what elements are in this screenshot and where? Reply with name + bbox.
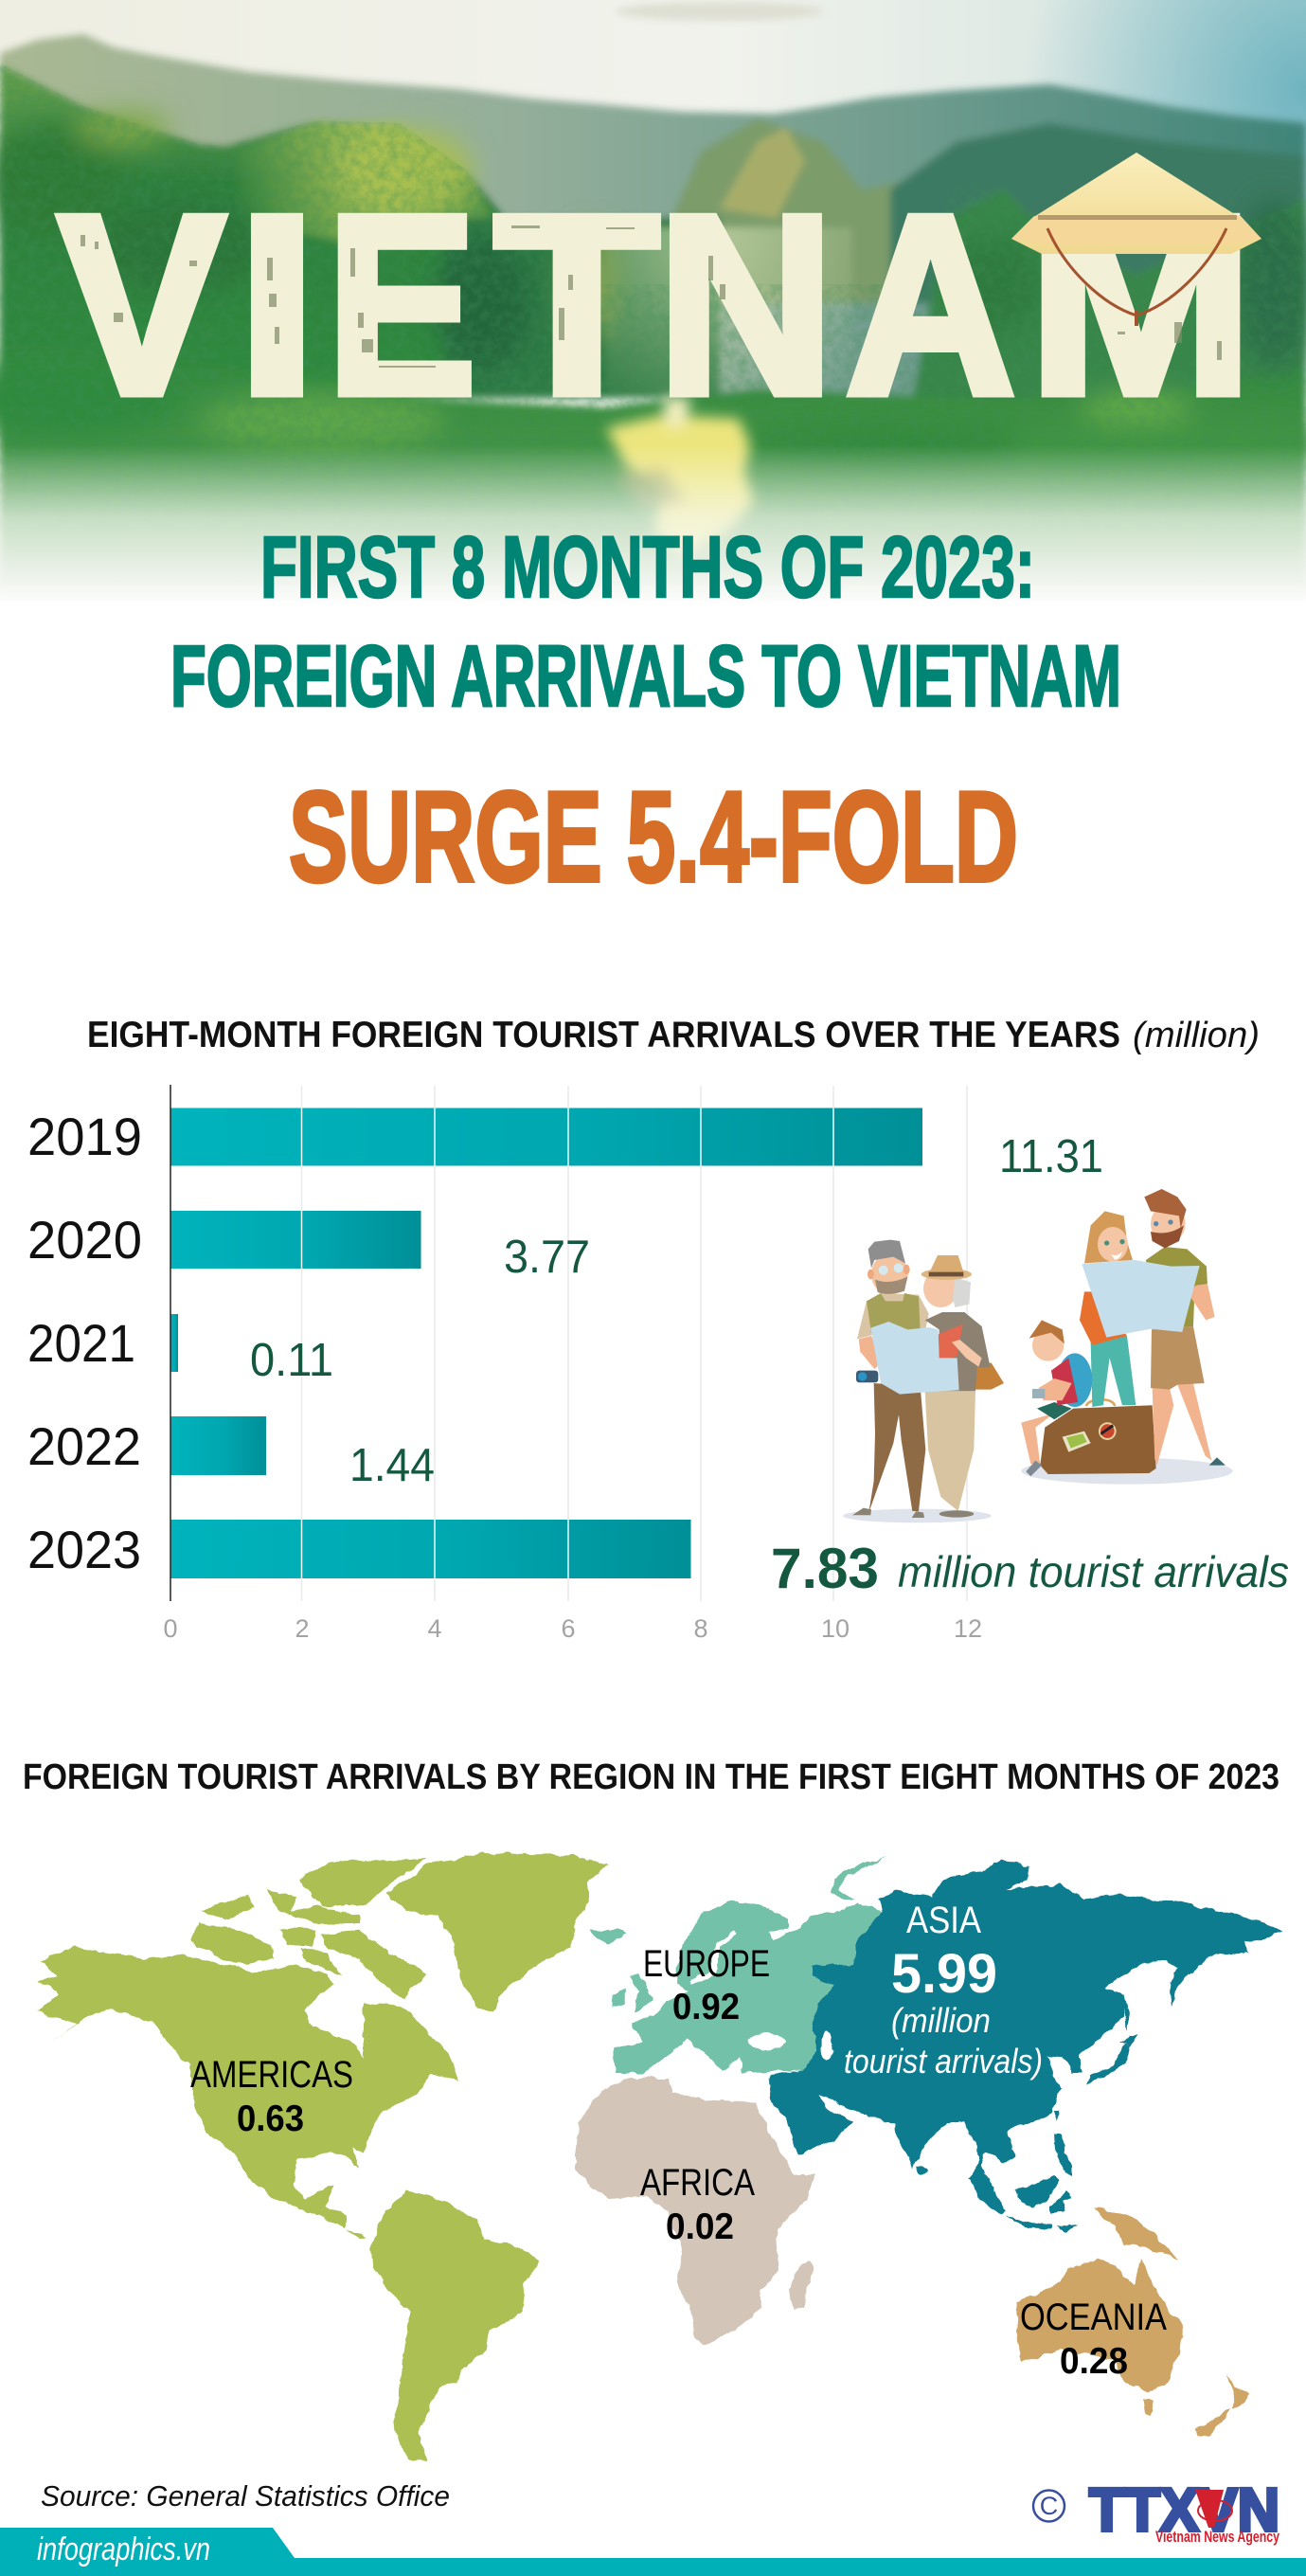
label: Americas 0.63: 0.63 <box>237 2099 304 2139</box>
hero: Vietnam landscape banner <box>0 0 1306 606</box>
title art: VIETNAM letters: I <box>236 162 318 448</box>
bar: 2023 <box>170 1520 691 1578</box>
title art: VIETNAM letters: N <box>657 162 834 448</box>
title art: VIETNAM letters: A <box>846 161 1015 447</box>
label: Americas 0.63: AMERICAS <box>190 2054 353 2096</box>
source note: Source: General Statistics Office <box>41 2479 450 2513</box>
icon: copyright <box>1033 2490 1064 2522</box>
value labels: 1.44 <box>349 1440 435 1491</box>
title art: VIETNAM letters <box>53 212 1241 398</box>
younger woman <box>1080 1211 1136 1407</box>
axis labels: 4 <box>427 1614 442 1643</box>
chart unit: (million) <box>1133 1016 1260 1055</box>
label: Europe 0.92 <box>643 1943 770 2027</box>
label: Asia 5.99 <box>844 1900 1043 2081</box>
label: Asia 5.99: tourist arrivals) <box>844 2042 1043 2081</box>
year labels: 2021 <box>27 1313 135 1373</box>
year labels: 2019 <box>27 1107 142 1166</box>
older man <box>852 1240 929 1518</box>
callout: 2023 total: million tourist arrivals <box>898 1547 1289 1596</box>
label: Oceania 0.28: OCEANIA <box>1020 2297 1167 2338</box>
icon: conical hat <box>1011 153 1261 326</box>
bar: 2019 <box>170 1108 922 1165</box>
bar: 2021 <box>170 1314 178 1372</box>
map held by couple <box>870 1322 959 1395</box>
axis labels: 2 <box>295 1614 310 1643</box>
younger man <box>1144 1189 1225 1466</box>
footer site name: infographics.vn <box>37 2531 210 2567</box>
title art: VIETNAM letters: E <box>327 162 476 447</box>
bar chart: arrivals by year <box>27 1085 1103 1643</box>
axis labels: 10 <box>821 1614 850 1643</box>
logo: TTXVN Vietnam News Agency: TTXVN <box>1089 2476 1279 2544</box>
label: Africa 0.02: 0.02 <box>666 2207 734 2247</box>
bar: 2022 <box>170 1416 266 1475</box>
value labels: 0.11 <box>250 1335 333 1386</box>
year labels: 2023 <box>27 1520 141 1579</box>
label: Asia 5.99: 5.99 <box>891 1943 997 2005</box>
region: Oceania <box>1016 2207 1249 2437</box>
label: Oceania 0.28 <box>1020 2297 1167 2382</box>
title art: VIETNAM letters: M <box>1028 161 1254 447</box>
label: Africa 0.02 <box>640 2162 755 2247</box>
region: Americas <box>38 1853 609 2461</box>
year labels: 2020 <box>27 1210 142 1270</box>
label: Europe 0.92: 0.92 <box>672 1987 740 2027</box>
bar: 2020 <box>170 1211 420 1269</box>
illustration: tourists reading maps <box>843 1189 1233 1522</box>
axis labels <box>163 1614 982 1643</box>
map held by family <box>1082 1260 1200 1338</box>
world map <box>38 1853 1283 2461</box>
year labels <box>27 1107 142 1579</box>
axis labels: 0 <box>163 1614 178 1643</box>
region: Africa <box>576 2078 815 2346</box>
label: Americas 0.63 <box>190 2054 353 2139</box>
value labels: 3.77 <box>504 1232 590 1283</box>
older woman <box>921 1255 1004 1518</box>
callout: 2023 total <box>771 1537 1289 1600</box>
value labels <box>250 1131 1103 1491</box>
value labels: 11.31 <box>999 1131 1103 1182</box>
title art: VIETNAM letters: V <box>58 162 226 448</box>
axis labels: 6 <box>561 1614 576 1643</box>
icon: copyright: C <box>1040 2492 1058 2520</box>
label: Asia 5.99: (million <box>891 2001 991 2040</box>
axis labels: 12 <box>954 1614 982 1643</box>
chart title: EIGHT-MONTH FOREIGN TOURIST ARRIVALS OVER THE YEARS <box>87 1015 1120 1055</box>
label: Asia 5.99: ASIA <box>906 1900 981 1941</box>
callout: 2023 total: 7.83 <box>771 1537 879 1600</box>
axis labels: 8 <box>693 1614 708 1643</box>
region: Europe <box>590 1857 887 2073</box>
year labels: 2022 <box>27 1416 141 1476</box>
label: Oceania 0.28: 0.28 <box>1060 2341 1128 2382</box>
label: Africa 0.02: AFRICA <box>640 2162 755 2204</box>
region: Asia <box>769 1860 1283 2232</box>
suitcase <box>1040 1399 1156 1474</box>
boy <box>1021 1320 1092 1476</box>
title art: VIETNAM letters: T <box>494 161 659 447</box>
label: Europe 0.92: EUROPE <box>643 1943 770 1985</box>
footer band <box>0 2528 1306 2576</box>
